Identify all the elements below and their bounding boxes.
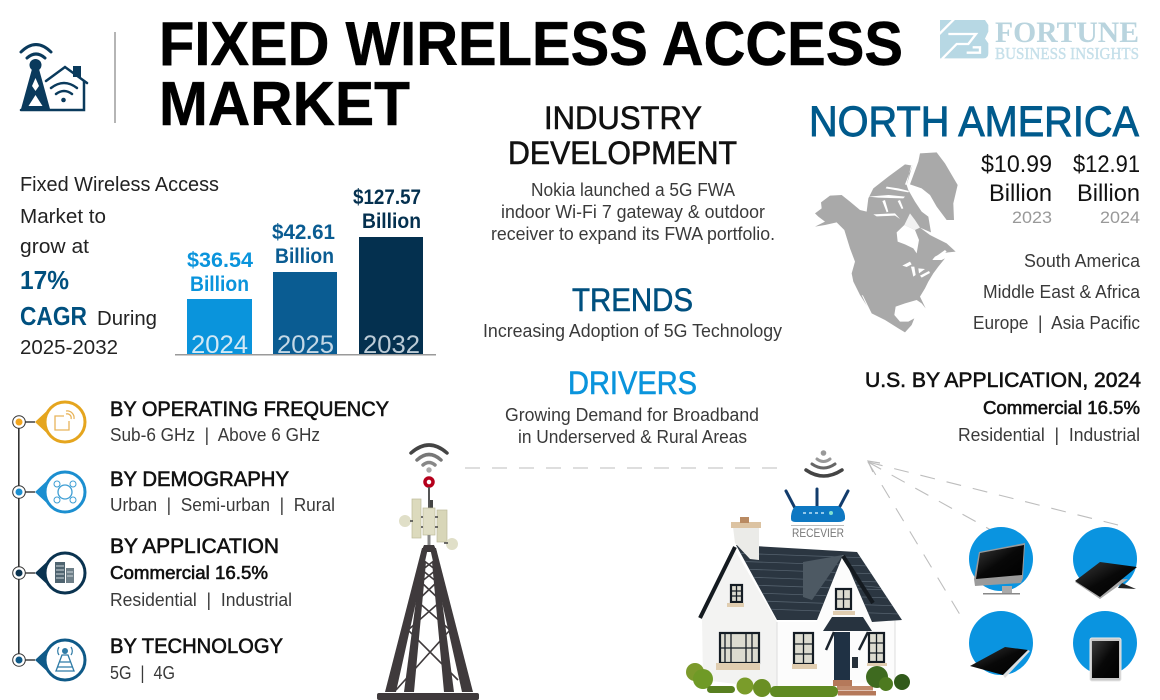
door and awning bbox=[823, 617, 872, 680]
CAGR text block: 2025-2032 bbox=[20, 337, 118, 359]
device: convertible laptop bbox=[1073, 527, 1138, 600]
values: north america market size bbox=[981, 151, 1140, 227]
text: industry development body: Nokia launched a 5G FWA bbox=[531, 180, 735, 200]
bar 2025: Billion bbox=[275, 244, 334, 268]
block: drivers: Growing Demand for Broadband bbox=[505, 405, 759, 425]
block: U.S. by application: U.S. BY APPLICATION, 2024 bbox=[865, 369, 1141, 392]
connection: tower to receiver bbox=[465, 467, 780, 469]
block: trends: Increasing Adoption of 5G Technology bbox=[483, 321, 782, 341]
CAGR text block: Fixed Wireless Access bbox=[20, 174, 219, 196]
windows bbox=[720, 585, 884, 664]
device: tablet bbox=[1073, 611, 1137, 681]
block: U.S. by application bbox=[865, 369, 1141, 445]
illustration: house bbox=[686, 517, 910, 697]
title: FIXED WIRELESS ACCESS bbox=[159, 10, 903, 79]
bar 2024 bbox=[187, 248, 253, 359]
steps bbox=[833, 680, 876, 696]
segment: demography bbox=[13, 468, 335, 515]
list: other regions: Middle East & Africa bbox=[983, 282, 1141, 302]
bar 2024: Billion bbox=[190, 272, 249, 296]
heading: industry development: INDUSTRY bbox=[544, 100, 702, 136]
walls bbox=[702, 550, 777, 689]
values: north america market size: Billion bbox=[1077, 180, 1140, 207]
heading: industry development: DEVELOPMENT bbox=[508, 135, 737, 171]
segment: demography: Urban | Semi-urban | Rural bbox=[110, 495, 335, 515]
logo: Fortune Business Insights bbox=[939, 16, 1139, 63]
block: U.S. by application: Commercial 16.5% bbox=[983, 398, 1140, 418]
values: north america market size: Billion bbox=[989, 180, 1052, 207]
bar 2025 bbox=[272, 220, 337, 359]
dormer bbox=[803, 555, 843, 600]
text: industry development body bbox=[491, 180, 775, 244]
icon: receiver wifi bbox=[806, 450, 842, 476]
segment: demography: BY DEMOGRAPHY bbox=[110, 468, 289, 491]
CAGR text block: During bbox=[97, 308, 157, 330]
segment: technology: BY TECHNOLOGY bbox=[110, 635, 283, 658]
segment: technology bbox=[13, 635, 283, 683]
values: north america market size: $12.91 bbox=[1073, 151, 1140, 178]
list: other regions: South America bbox=[1024, 251, 1141, 271]
icon: router receiver: RECEVIER bbox=[792, 528, 844, 540]
bar 2032 bbox=[353, 185, 423, 359]
segment: technology: 5G | 4G bbox=[110, 663, 175, 683]
block: trends bbox=[483, 282, 782, 341]
bar 2032: 2032 bbox=[363, 331, 420, 359]
icon: router receiver bbox=[786, 489, 848, 540]
segment timeline bbox=[13, 398, 389, 683]
header divider bbox=[114, 32, 116, 123]
bar 2032: Billion bbox=[362, 209, 421, 233]
connections: receiver to devices bbox=[868, 461, 1118, 618]
CAGR text block: grow at bbox=[20, 236, 89, 258]
title: MARKET bbox=[159, 70, 410, 139]
CAGR text block bbox=[20, 174, 219, 359]
bar 2025: 2025 bbox=[277, 331, 334, 359]
segment: application bbox=[13, 535, 292, 610]
block: drivers: in Underserved & Rural Areas bbox=[518, 427, 747, 447]
CAGR text block: Market to bbox=[20, 206, 106, 228]
device: laptop bbox=[969, 611, 1033, 678]
CAGR text block: CAGR bbox=[20, 301, 87, 331]
segment: operating frequency: Sub-6 GHz | Above 6 GHz bbox=[110, 425, 320, 445]
list: other regions bbox=[973, 251, 1141, 333]
roof bbox=[736, 545, 902, 622]
bar 2032: $127.57 bbox=[353, 185, 421, 209]
values: north america market size: 2024 bbox=[1100, 208, 1140, 227]
block: U.S. by application: Residential | Industrial bbox=[958, 425, 1140, 445]
segment: application: BY APPLICATION bbox=[110, 535, 279, 558]
segment: operating frequency: BY OPERATING FREQUENCY bbox=[110, 398, 389, 421]
block: trends: TRENDS bbox=[572, 282, 693, 318]
chimney bbox=[731, 517, 761, 560]
text: industry development body: receiver to expand its FWA portfolio. bbox=[491, 224, 775, 244]
block: drivers: DRIVERS bbox=[568, 365, 697, 401]
bar 2025: $42.61 bbox=[272, 220, 335, 244]
heading: north america: NORTH AMERICA bbox=[809, 98, 1139, 146]
title bbox=[159, 10, 903, 139]
logo: Fortune Business Insights: BUSINESS INSIGHTS bbox=[995, 44, 1139, 63]
device: desktop monitor bbox=[969, 527, 1033, 594]
illustration: cell tower bbox=[377, 445, 479, 700]
bushes bbox=[686, 663, 910, 697]
bar 2024: 2024 bbox=[191, 331, 248, 359]
logo: Fortune Business Insights: FORTUNE bbox=[995, 16, 1139, 49]
text: industry development body: indoor Wi-Fi 7 gateway & outdoor bbox=[501, 202, 765, 222]
CAGR text block: 17% bbox=[20, 265, 69, 295]
heading: industry development bbox=[508, 100, 737, 171]
bar chart: market size bbox=[175, 185, 436, 359]
list: other regions: Europe | Asia Pacific bbox=[973, 313, 1140, 333]
values: north america market size: 2023 bbox=[1012, 208, 1052, 227]
bar 2024: $36.54 bbox=[187, 248, 253, 272]
segment: application: Commercial 16.5% bbox=[110, 563, 268, 583]
block: drivers bbox=[505, 365, 759, 447]
segment: application: Residential | Industrial bbox=[110, 590, 292, 610]
map: north america bbox=[815, 152, 958, 332]
values: north america market size: $10.99 bbox=[981, 151, 1052, 178]
segment: operating frequency bbox=[13, 398, 389, 445]
header icon: tower and house bbox=[21, 44, 87, 110]
